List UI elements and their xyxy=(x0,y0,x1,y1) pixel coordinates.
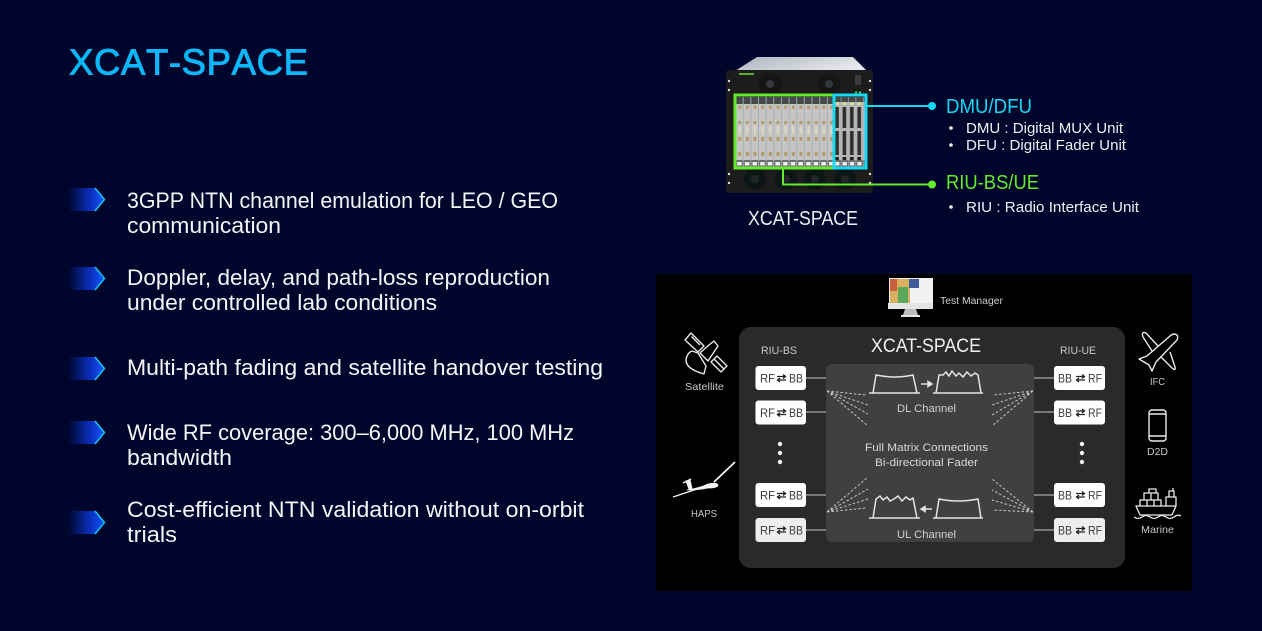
feature: Doppler, delay, path-loss: under controlled lab conditions xyxy=(127,290,437,315)
connector lines xyxy=(806,378,1054,530)
label: Satellite: Satellite xyxy=(685,381,724,393)
label: DL Channel: DL Channel xyxy=(897,403,956,415)
icon: satellite xyxy=(685,333,727,374)
label: UL Channel: UL Channel xyxy=(897,529,956,541)
panel: channel matrix xyxy=(826,364,1034,542)
RIU-BS converters: BB xyxy=(789,524,803,538)
RIU-BS converters: RF xyxy=(760,406,775,420)
label: Full Matrix Connections: Full Matrix Connections xyxy=(865,442,989,454)
feature: cost-efficient validation: trials xyxy=(127,522,177,547)
callout: RIU-BS/UE: RIU-BS/UE xyxy=(946,172,1039,194)
label: IFC: IFC xyxy=(1150,376,1165,388)
heading: XCAT-SPACE: XCAT-SPACE xyxy=(871,336,981,357)
RIU-UE converters: BB xyxy=(1058,372,1072,386)
label: Bi-directional Fader: Bi-directional Fader xyxy=(875,457,978,469)
RIU-UE converters xyxy=(1054,366,1105,542)
label: HAPS: HAPS xyxy=(691,508,717,520)
feature: Doppler, delay, path-loss xyxy=(68,265,550,315)
RIU-UE converters: BB xyxy=(1058,524,1072,538)
RIU-UE converters: BB xyxy=(1058,488,1072,502)
callout: DMU/DFU: DFU : Digital Fader Unit xyxy=(966,138,1126,154)
RIU-BS converters: BB xyxy=(789,406,803,420)
icon: test manager monitor xyxy=(888,278,933,317)
RIU-UE converters: RF xyxy=(1088,488,1102,502)
RIU-UE converters: RF xyxy=(1088,372,1102,386)
title: XCAT-SPACE xyxy=(69,42,308,82)
UL channel filters xyxy=(869,496,983,518)
RIU-UE converters: BB xyxy=(1058,406,1072,420)
label: Marine: Marine xyxy=(1141,524,1174,536)
feature list xyxy=(68,188,603,547)
feature: 3GPP NTN channel emulation xyxy=(68,188,558,238)
label: RIU-UE: RIU-UE xyxy=(1060,345,1096,357)
callout: RIU-BS/UE: RIU : Radio Interface Unit xyxy=(966,200,1139,216)
feature: wide RF coverage: bandwidth xyxy=(127,445,232,470)
label: RIU-BS: RIU-BS xyxy=(761,345,797,357)
feature: Doppler, delay, path-loss: Doppler, delay, and path-loss reproduction xyxy=(127,265,550,290)
RIU-BS converters xyxy=(756,366,806,542)
RIU highlight and leader xyxy=(735,95,936,188)
RIU-UE converters: RF xyxy=(1088,406,1102,420)
DMU highlight and leader xyxy=(834,95,936,168)
icon: marine ship xyxy=(1134,488,1181,518)
feature: 3GPP NTN channel emulation: 3GPP NTN channel emulation for LEO / GEO xyxy=(127,188,558,213)
RIU-BS converters: BB xyxy=(789,372,803,386)
RIU-UE converters: RF xyxy=(1088,524,1102,538)
icon: D2D phone xyxy=(1149,410,1166,441)
feature: multi-path fading: Multi-path fading and satellite handover testing xyxy=(127,355,603,380)
DL channel filters xyxy=(869,371,983,393)
feature: wide RF coverage xyxy=(68,420,574,470)
callout: DMU/DFU: DMU/DFU xyxy=(946,96,1032,118)
callout: DMU/DFU: DMU : Digital MUX Unit xyxy=(966,121,1123,137)
RIU-BS converters: RF xyxy=(760,524,775,538)
system architecture diagram xyxy=(656,274,1192,591)
RIU-BS converters: RF xyxy=(760,372,775,386)
label: Test Manager: Test Manager xyxy=(940,295,1003,307)
feature: wide RF coverage: Wide RF coverage: 300–6,000 MHz, 100 MHz xyxy=(127,420,574,445)
label: D2D: D2D xyxy=(1147,446,1168,458)
icon: HAPS glider xyxy=(673,462,735,497)
callout: RIU-BS/UE xyxy=(946,172,1139,216)
feature: cost-efficient validation xyxy=(68,497,584,547)
hardware chassis photo xyxy=(726,57,873,193)
fan-out paths xyxy=(827,391,1033,512)
icon: IFC airplane xyxy=(1139,332,1178,371)
RIU-BS converters: BB xyxy=(789,488,803,502)
panel: XCAT-SPACE system xyxy=(739,327,1125,568)
feature: cost-efficient validation: Cost-efficient NTN validation without on-orbit xyxy=(127,497,584,522)
chassis caption: XCAT-SPACE xyxy=(748,208,858,230)
feature: 3GPP NTN channel emulation: communication xyxy=(127,213,281,238)
callout: DMU/DFU xyxy=(946,96,1126,154)
RIU-BS converters: RF xyxy=(760,488,775,502)
